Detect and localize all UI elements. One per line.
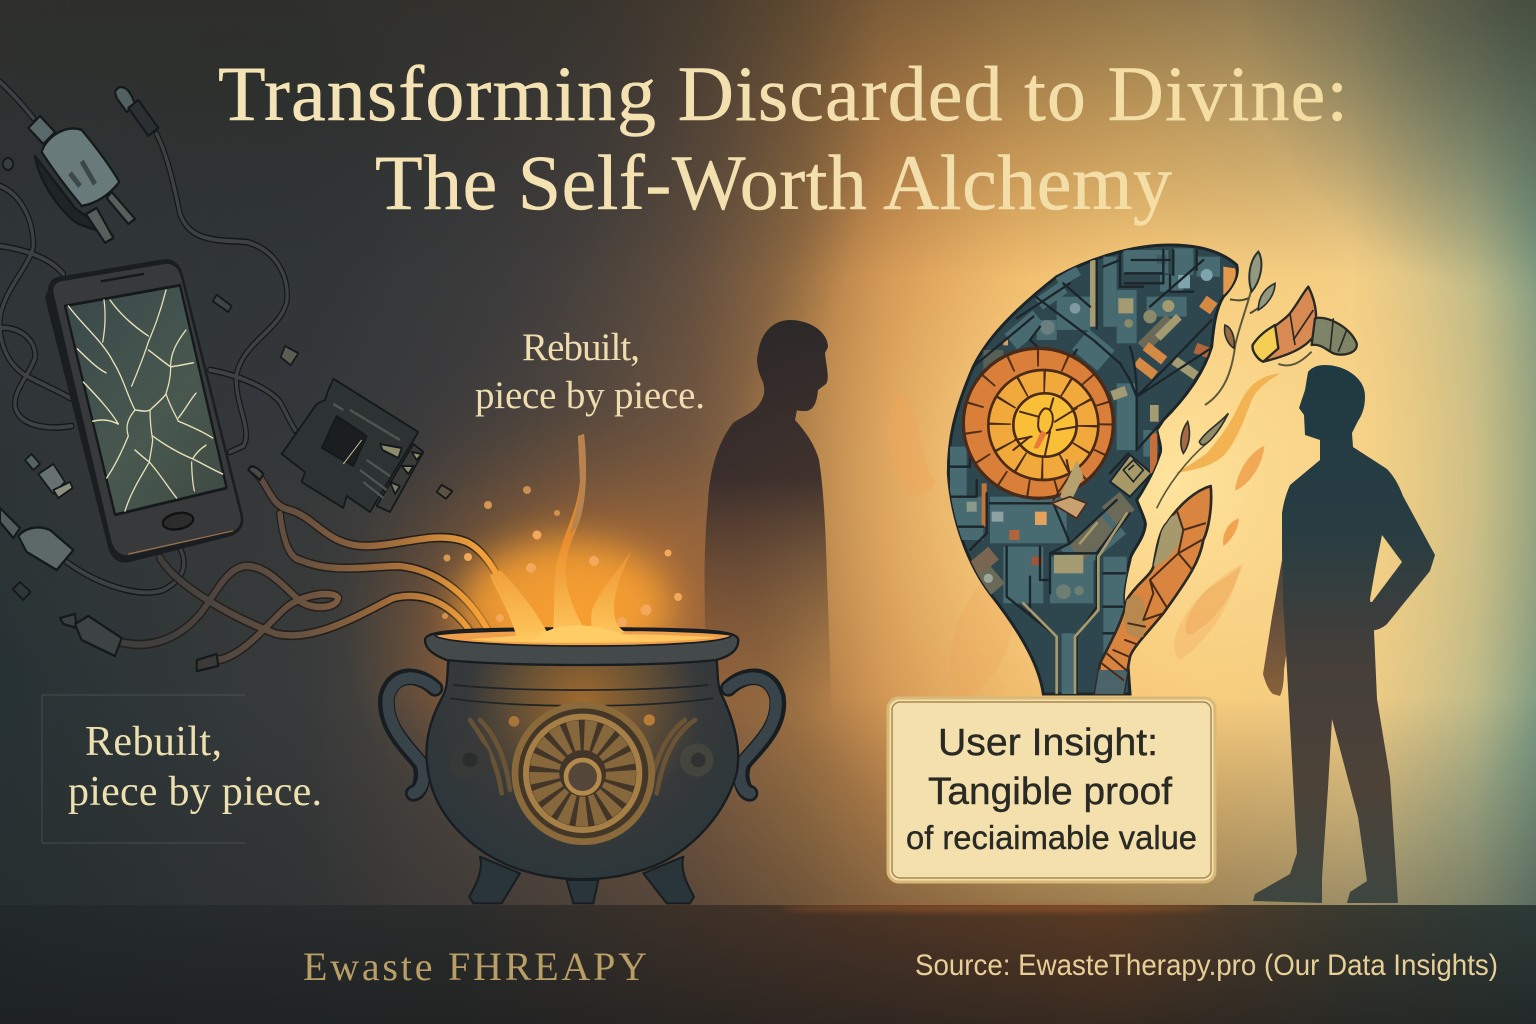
screen cracks <box>68 290 223 511</box>
icon: jack connector <box>60 467 263 671</box>
icon: cracked smartphone <box>45 259 243 562</box>
icon: cauldron <box>386 628 778 903</box>
callout text <box>906 722 1197 856</box>
illustration: discarded e-waste <box>0 82 510 671</box>
handles <box>386 677 778 793</box>
small debris pieces <box>3 158 452 600</box>
left text box: Rebuilt, <box>85 719 222 765</box>
orange mosaic leaf <box>1095 486 1211 694</box>
left text box <box>42 695 322 843</box>
flower <box>1253 287 1357 366</box>
icon: circuit board <box>282 379 423 512</box>
icon: USB plug left <box>0 508 73 570</box>
center wandering text: piece by piece. <box>475 374 705 417</box>
icon: wall plug <box>28 116 135 243</box>
callout text: Tangible proof <box>928 771 1172 813</box>
callout text: User Insight: <box>938 722 1158 764</box>
mandala medallion <box>449 705 713 842</box>
glow and sparks <box>442 486 682 667</box>
tangled cables <box>0 82 295 592</box>
feet <box>469 857 694 903</box>
callout: user insight <box>888 698 1215 882</box>
silhouette: shadow man <box>705 320 832 720</box>
illustration: mosaic head <box>948 245 1357 697</box>
vine and leaves <box>1205 252 1275 405</box>
callout text: of reciaimable value <box>906 819 1197 856</box>
title <box>218 50 1348 226</box>
left text box: piece by piece. <box>68 769 322 815</box>
silhouette: standing man <box>1253 365 1435 903</box>
center wandering text: Rebuilt, <box>522 326 640 369</box>
rising flame leaves <box>1157 373 1280 634</box>
glowing concentric rings <box>963 348 1113 518</box>
icon: loose connector top <box>115 87 158 136</box>
pot body <box>426 660 738 879</box>
source note: Source: EwasteTherapy.pro (Our Data Insights) <box>915 949 1498 982</box>
title: The Self-Worth Alchemy <box>375 139 1172 226</box>
footer brand: Ewaste FHREAPY <box>303 944 647 989</box>
cables flowing into the cauldron <box>120 470 510 660</box>
head silhouette with circuit pattern <box>948 245 1237 697</box>
flames over the rim <box>490 434 640 642</box>
body <box>1253 365 1435 903</box>
hanging arm <box>1263 513 1300 696</box>
center wandering text <box>475 326 705 417</box>
rim <box>425 628 738 665</box>
floor <box>0 904 1536 1024</box>
title: Transforming Discarded to Divine: <box>218 50 1348 137</box>
